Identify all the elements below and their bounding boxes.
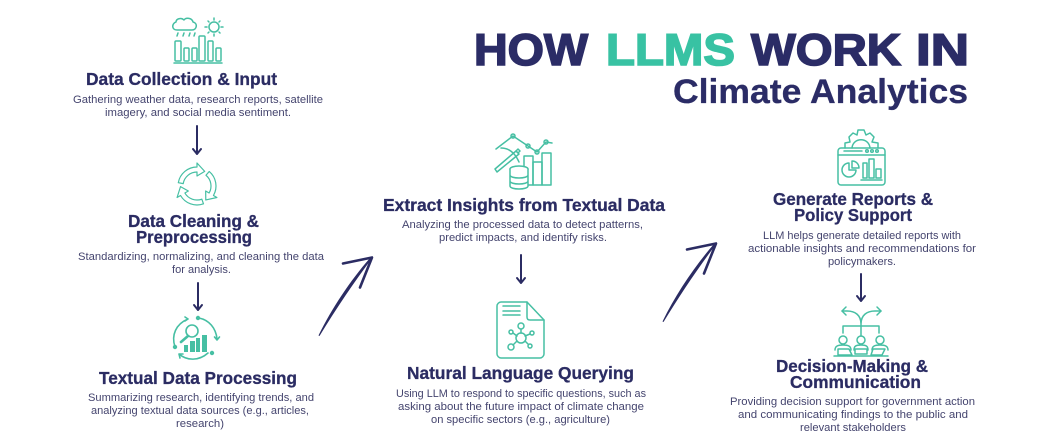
- heading: [128, 211, 259, 247]
- description: Providing decision support for government action: [730, 396, 975, 408]
- heading: Communication: [790, 372, 921, 392]
- description: [88, 392, 314, 430]
- description: Standardizing, normalizing, and cleaning the data: [78, 251, 324, 263]
- heading: Data Cleaning &: [128, 211, 259, 231]
- panel: textual processing: [88, 316, 314, 430]
- description: and communicating findings to the public and: [738, 409, 968, 421]
- description: policymakers.: [828, 256, 896, 268]
- arrow: cleaning to processing: [194, 283, 202, 310]
- panel: generate reports: [748, 130, 977, 268]
- description: Summarizing research, identifying trends, and: [88, 392, 314, 404]
- title: HOW: [474, 26, 588, 75]
- description: [73, 94, 323, 119]
- subtitle: Climate Analytics: [673, 73, 968, 111]
- description: predict impacts, and identify risks.: [439, 232, 607, 244]
- heading: Generate Reports &: [773, 189, 933, 209]
- heading: Preprocessing: [136, 227, 252, 247]
- description: Using LLM to respond to specific questions, such as: [396, 388, 646, 400]
- arrow: collection to cleaning: [193, 126, 201, 154]
- title: IN: [916, 26, 969, 75]
- icon: document network: [497, 302, 544, 358]
- panel: data cleaning: [78, 163, 324, 276]
- heading: Decision-Making &: [776, 356, 928, 376]
- icon: decision people: [834, 307, 888, 356]
- description: asking about the future impact of climate change: [398, 401, 644, 413]
- title: WORK: [751, 26, 901, 75]
- icon: mining data chart: [495, 134, 552, 189]
- heading: Data Collection & Input: [86, 69, 277, 89]
- description: [402, 219, 643, 244]
- heading: [776, 356, 928, 392]
- description: [396, 388, 646, 426]
- description: [730, 396, 975, 434]
- description: [748, 230, 977, 268]
- arrow: second to third column: [662, 243, 717, 322]
- heading: Natural Language Querying: [407, 363, 634, 383]
- heading: Textual Data Processing: [99, 368, 297, 388]
- description: relevant stakeholders: [800, 422, 906, 434]
- description: Gathering weather data, research reports, satellite: [73, 94, 323, 106]
- description: [78, 251, 324, 276]
- description: imagery, and social media sentiment.: [105, 107, 291, 119]
- icon: recycle loop: [173, 163, 226, 214]
- heading: [773, 189, 933, 225]
- title: [474, 26, 969, 75]
- icon: gear dashboard: [838, 130, 885, 185]
- description: Analyzing the processed data to detect patterns,: [402, 219, 643, 231]
- description: research): [176, 418, 224, 430]
- description: analyzing textual data sources (e.g., articles,: [91, 405, 309, 417]
- arrow: first to second column: [318, 257, 373, 336]
- heading: Extract Insights from Textual Data: [383, 195, 665, 215]
- panel: natural language querying: [396, 302, 646, 426]
- icon: magnifier analytics: [173, 316, 220, 359]
- description: for analysis.: [172, 264, 231, 276]
- panel: extract insights: [383, 134, 665, 244]
- description: LLM helps generate detailed reports with: [763, 230, 961, 242]
- heading: Policy Support: [794, 205, 912, 225]
- description: actionable insights and recommendations for: [748, 243, 977, 255]
- title: LLMS: [606, 26, 735, 75]
- icon: weather and bars: [173, 18, 223, 63]
- arrow: insights to querying: [517, 255, 525, 283]
- panel: data collection: [73, 18, 323, 119]
- panel: decision making: [730, 307, 975, 434]
- description: on specific sectors (e.g., agriculture): [431, 414, 610, 426]
- arrow: reports to decisions: [857, 274, 865, 301]
